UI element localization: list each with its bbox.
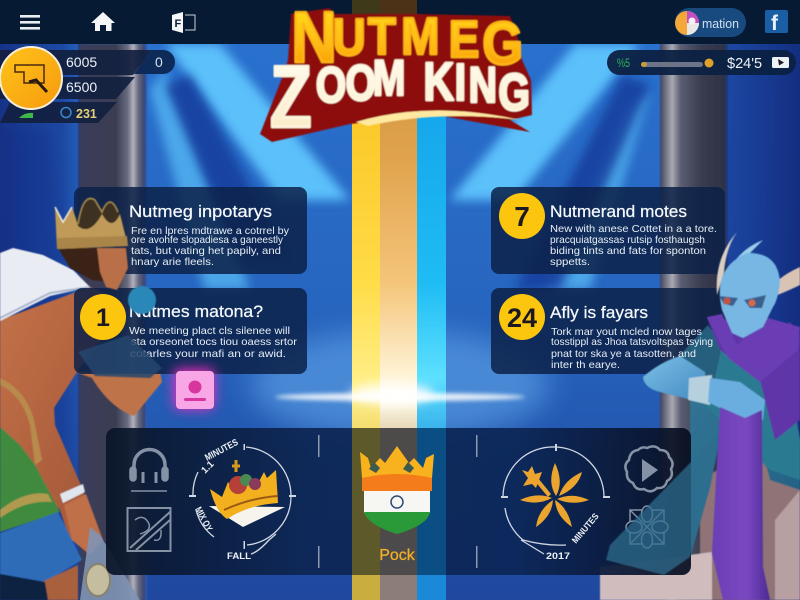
left HUD stats <box>0 47 175 123</box>
torso and arm <box>0 287 128 545</box>
icon: menu <box>20 15 40 30</box>
body text: inter th earye. <box>551 359 620 371</box>
torso <box>690 345 800 480</box>
crown <box>55 198 128 249</box>
title logo: I <box>455 53 466 111</box>
title logo: N <box>291 0 337 78</box>
shoulder <box>680 325 722 378</box>
icon: home <box>91 12 115 31</box>
number badge 24: 24 <box>507 303 537 333</box>
right stage pillar <box>660 44 728 600</box>
body text <box>550 223 717 268</box>
stat row 231: 231 <box>76 107 97 121</box>
panel: Afly is fayars background <box>491 288 725 374</box>
title logo: E <box>449 11 479 69</box>
right character: upper body <box>606 232 800 600</box>
robe overlay on toolbar <box>606 433 717 575</box>
body text: hnary arie fleels. <box>131 256 214 268</box>
number badge 24 <box>499 294 545 340</box>
title logo: O <box>316 56 346 113</box>
icon: zoom badge <box>0 47 62 109</box>
left character: head and crown <box>55 198 156 314</box>
stat row 6005: 6005 <box>66 54 97 70</box>
ring badge: star flower <box>501 444 610 562</box>
back scarf <box>707 318 800 440</box>
ring badge: crown: FALL <box>227 551 251 562</box>
heading: Nutmerand motes <box>550 202 687 221</box>
right HUD progress bar <box>607 50 796 75</box>
icon: facebook <box>765 10 788 35</box>
blue skirt <box>0 512 82 582</box>
ring badge: star flower: 2017 <box>546 551 570 562</box>
icon: India flag crown shield <box>360 446 434 534</box>
face <box>97 248 128 290</box>
icon: play flower <box>625 446 673 491</box>
icon: headphones <box>130 450 168 491</box>
stat row 6005 <box>0 50 152 75</box>
body text: tats, but vating het papily, and <box>131 245 281 257</box>
forearm <box>75 372 162 416</box>
right HUD progress bar: $24'5 <box>727 56 762 72</box>
stat row 231 <box>0 102 117 123</box>
panel content: Afly is fayars <box>499 294 713 371</box>
heading: Nutmes matona? <box>129 302 263 321</box>
body text: ore avohfe slopadiesa a ganeestly <box>131 234 284 246</box>
title logo: K <box>424 52 454 112</box>
body text: cotarles your mafi an or awid. <box>130 348 286 360</box>
icon: facebook: f <box>771 12 779 35</box>
panel: bottom toolbar <box>106 428 691 575</box>
stat row 6500 <box>0 77 135 99</box>
pennant with medal <box>80 527 140 600</box>
panel: Nutmes matona? <box>74 288 307 374</box>
robe <box>606 350 800 560</box>
belt <box>0 378 42 465</box>
right character: lower body <box>600 350 800 600</box>
title logo: Z <box>270 48 312 146</box>
title logo: U <box>333 9 366 67</box>
stat row 6500: 6500 <box>66 79 97 95</box>
body text: New with anese Cottet in a a tore. <box>550 223 717 235</box>
right arm <box>643 356 708 404</box>
body text <box>551 326 713 371</box>
title logo: M <box>401 8 439 66</box>
profile pill: mation <box>702 17 739 31</box>
ring badge: crown: MIX OY <box>192 505 215 534</box>
body text: sppetts. <box>550 256 590 268</box>
body text: pracquiatgassas rutsip fosthaugsh <box>550 234 705 246</box>
heading: Nutmeg inpotarys <box>129 202 272 221</box>
number badge 1 <box>80 294 126 340</box>
icon: pink glow button <box>174 369 214 409</box>
panel: Nutmeg inpotarys <box>74 187 307 274</box>
body text: tosstippl as Jhoa tatsvoltspas tsying <box>551 336 713 348</box>
title logo: G <box>498 63 530 121</box>
body text: biding tints and fats for sponton <box>550 245 706 257</box>
profile pill <box>675 8 746 37</box>
top navigation bar <box>0 0 800 44</box>
ring badge: crown <box>189 437 296 562</box>
body text <box>131 225 290 268</box>
wristband <box>60 484 85 503</box>
number badge 7 <box>499 193 545 239</box>
label: Pock: Pock <box>379 547 416 564</box>
body text: pnat tor ska ye a tasotten, and <box>551 348 696 360</box>
number badge 7: 7 <box>514 201 530 232</box>
body text: sta orseonet tocs tiou oaess srtor <box>131 336 298 348</box>
panel: Nutmerand motes <box>491 187 725 274</box>
icon: ornament <box>626 506 668 548</box>
horns <box>717 232 737 295</box>
shoulder cloth <box>0 248 90 321</box>
number badge 1: 1 <box>96 304 110 332</box>
icon: book F: F <box>174 18 182 30</box>
scarf collar <box>707 314 800 382</box>
heading: Afly is fayars <box>550 303 648 322</box>
title logo: N <box>469 56 497 113</box>
title logo: G <box>482 10 523 77</box>
left character: body <box>0 248 162 600</box>
blue ball <box>128 286 156 314</box>
title logo: T <box>368 8 396 66</box>
bracer on left arm <box>78 335 162 378</box>
body text: Fre en lpres mdtrawe a cotrrel by <box>131 225 290 237</box>
title logo <box>260 0 532 146</box>
hanging scarf <box>712 407 770 600</box>
body text: We meeting plact cls silenee will <box>129 325 290 337</box>
ring badge: crown: 1.1 <box>199 458 217 476</box>
green shorts <box>0 427 60 532</box>
icon: crossed square <box>128 508 170 551</box>
right HUD progress bar: %5 <box>617 56 630 70</box>
icon: book F <box>172 12 195 33</box>
title logo: O <box>346 54 376 111</box>
body text: Tork mar yout mcled now tages <box>551 326 702 338</box>
ring badge: star flower: MINUTES <box>570 511 601 545</box>
stat pill 0: 0 <box>155 54 163 70</box>
left stage pillar <box>78 44 147 600</box>
centre colour strips <box>275 44 525 600</box>
head <box>720 253 780 338</box>
title logo: M <box>373 49 405 106</box>
ring badge: crown: MINUTES <box>203 437 240 464</box>
hair <box>58 248 113 282</box>
hand <box>64 494 103 555</box>
stat pill 0 <box>134 50 175 74</box>
body text <box>129 325 298 360</box>
trousers <box>700 440 800 600</box>
